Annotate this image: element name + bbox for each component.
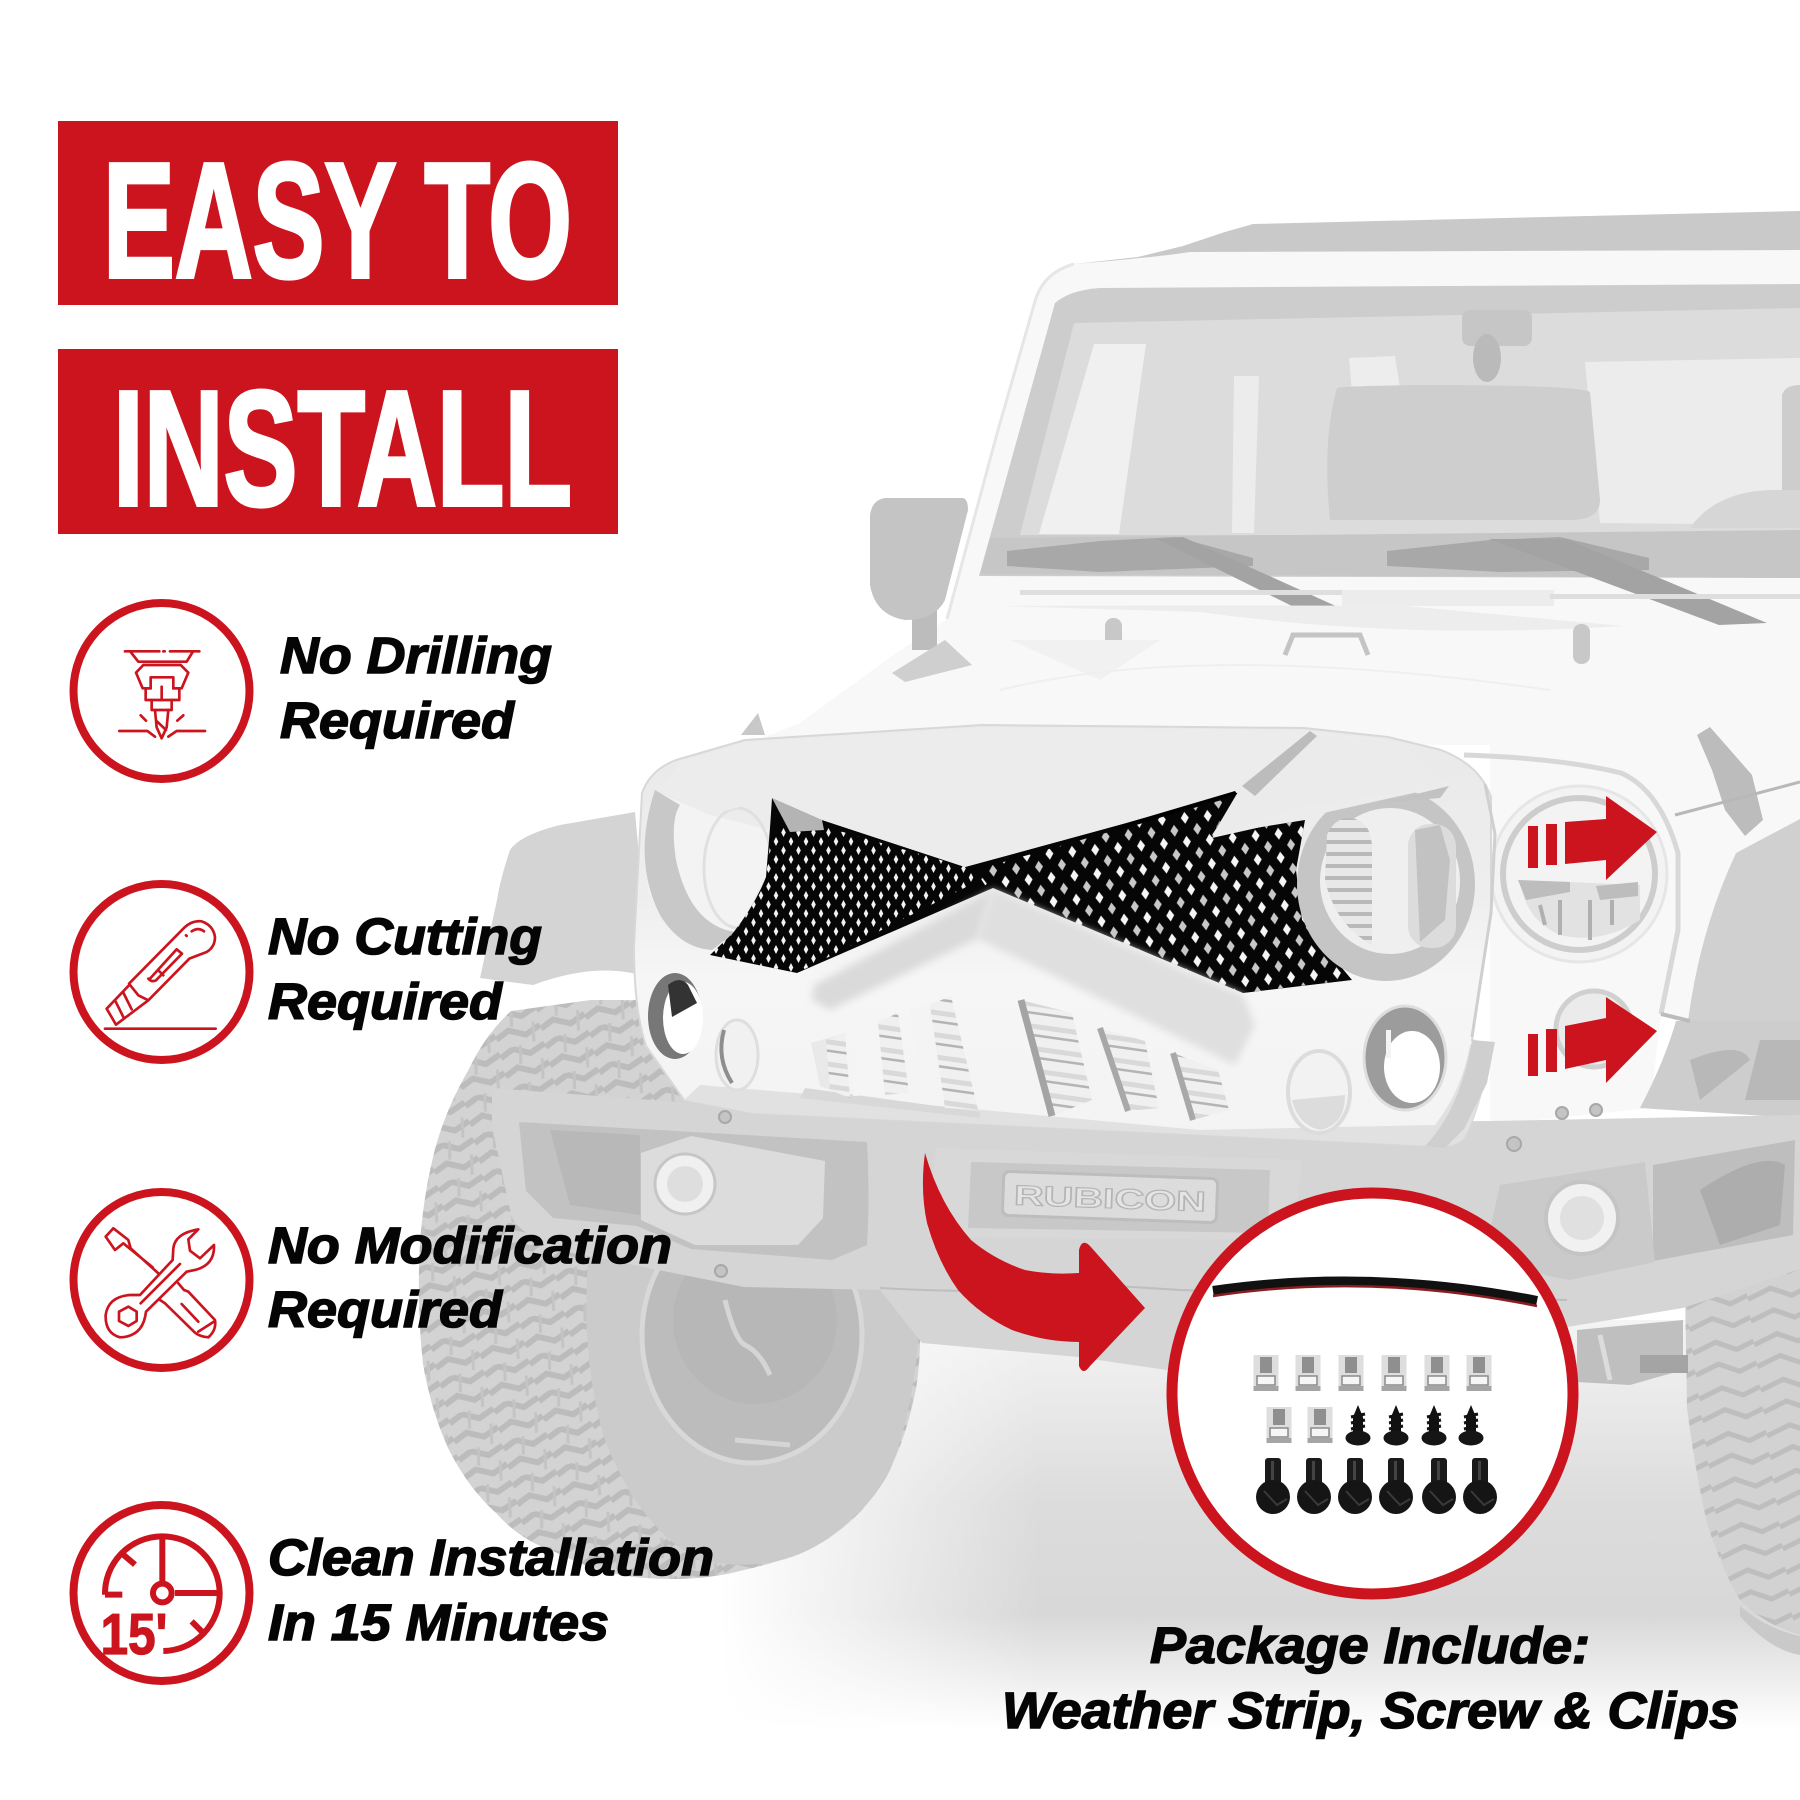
icon: upper red arrow bbox=[1528, 796, 1657, 880]
right fender flare and engine bay bbox=[1640, 819, 1800, 1118]
icon: no drilling bbox=[74, 603, 250, 779]
icon: clean installation in 15 minutes: 15' bbox=[101, 1603, 167, 1667]
icon: clean installation in 15 minutes bbox=[74, 1505, 250, 1681]
roof bbox=[1052, 211, 1800, 290]
text: no modification: Required bbox=[268, 1281, 504, 1338]
icon: curved red arrow bbox=[923, 1153, 1145, 1371]
text: no cutting: Required bbox=[268, 973, 504, 1030]
body: windshield frame and hood bbox=[745, 250, 1800, 1125]
top brow bbox=[660, 727, 1449, 867]
left fog lamp bbox=[655, 1154, 715, 1214]
rubicon badge bbox=[1002, 1171, 1218, 1223]
round openings bbox=[648, 973, 1446, 1133]
text: no drilling: Required bbox=[280, 692, 516, 749]
text: clean installation: Clean Installation bbox=[268, 1529, 714, 1586]
text: no drilling: No Drilling bbox=[280, 627, 552, 684]
hood hinge bbox=[1464, 727, 1800, 1014]
text: no cutting: No Cutting bbox=[268, 908, 542, 965]
screws bbox=[1346, 1405, 1484, 1446]
right eye bbox=[1297, 787, 1475, 981]
nose chevron shading bbox=[812, 890, 1255, 1065]
metal clips bbox=[1254, 1355, 1492, 1443]
text: no cutting bbox=[268, 908, 542, 1030]
caption: package include: Package Include: bbox=[1150, 1617, 1590, 1674]
right recess bbox=[1653, 1140, 1795, 1261]
side mirror bbox=[870, 498, 968, 650]
caption: package include bbox=[1002, 1617, 1739, 1739]
grille bbox=[634, 725, 1495, 1148]
right fog lamp bbox=[1546, 1182, 1618, 1254]
hood details bbox=[741, 590, 1800, 735]
suspension bbox=[1577, 1320, 1688, 1385]
front bumper bbox=[492, 1088, 1800, 1385]
mesh panel bbox=[710, 792, 1352, 993]
text: no modification bbox=[268, 1217, 672, 1338]
icon: no cutting bbox=[74, 884, 250, 1060]
rubicon badge: RUBICON bbox=[1014, 1180, 1206, 1217]
wheel rim bbox=[642, 1207, 862, 1463]
title banner: easy to bbox=[58, 121, 618, 312]
title banner: install bbox=[58, 349, 618, 540]
text: clean installation bbox=[268, 1529, 714, 1651]
right louvers bbox=[1021, 1000, 1229, 1120]
left front tire bbox=[419, 1000, 920, 1579]
right lower hook of the grille bbox=[1425, 1040, 1495, 1148]
headlight bbox=[1491, 786, 1667, 962]
icon: lower red arrow bbox=[1528, 997, 1657, 1083]
title banner: install: INSTALL bbox=[113, 357, 572, 540]
wipers bbox=[1007, 537, 1253, 572]
text: no modification: No Modification bbox=[268, 1217, 672, 1274]
icon: no modification bbox=[74, 1192, 250, 1368]
left fender flare bbox=[480, 812, 650, 985]
package contents circle bbox=[1172, 1193, 1573, 1594]
windshield bbox=[979, 284, 1800, 625]
lower signal lamp bbox=[1556, 991, 1632, 1067]
left eye bbox=[645, 790, 772, 950]
right front tire bbox=[1685, 1260, 1800, 1655]
weather strip bbox=[1213, 1282, 1537, 1306]
left louvers bbox=[800, 996, 980, 1118]
bumper bolts bbox=[715, 1104, 1602, 1277]
jeep photo, faded bbox=[419, 211, 1800, 1655]
text: no drilling bbox=[280, 627, 552, 749]
caption: package include: Weather Strip, Screw & Clips bbox=[1002, 1682, 1739, 1739]
text: clean installation: In 15 Minutes bbox=[268, 1594, 609, 1651]
title banner: easy to: EASY TO bbox=[103, 129, 572, 312]
left recess bbox=[519, 1122, 868, 1260]
ground shadow bbox=[720, 1320, 1800, 1730]
push pins bbox=[1256, 1458, 1497, 1514]
center plate bbox=[927, 1148, 1302, 1240]
